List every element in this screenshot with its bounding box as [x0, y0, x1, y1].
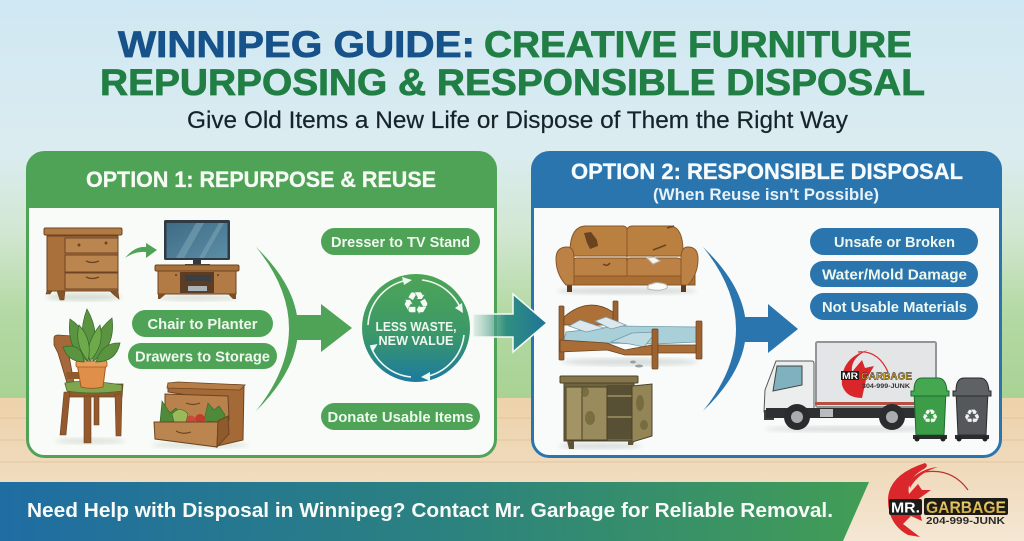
- label: not usable materials: Not Usable Materials: [822, 299, 967, 316]
- truck logo: 304-999-JUNK: [862, 384, 911, 390]
- title: CREATIVE FURNITURE: [484, 24, 912, 65]
- panel: option 2 responsible disposal: [532, 152, 1001, 456]
- truck logo: [841, 350, 912, 398]
- icon: green recycling bin: ♻: [921, 407, 939, 428]
- arrow: crescent to removal: [703, 247, 798, 411]
- icon: damaged sofa: [556, 226, 698, 294]
- icon: moldy cabinet: [558, 376, 652, 449]
- label: donate usable items: [321, 403, 480, 430]
- label: chair to planter: [132, 310, 273, 337]
- icon: recycle symbol: ♻: [402, 286, 430, 321]
- footer banner: [0, 482, 869, 541]
- logo: mr garbage: [888, 463, 1008, 537]
- icon: tv on stand: [155, 220, 239, 301]
- logo: mr garbage: MR.: [891, 500, 920, 516]
- arrow: crescent to result: [256, 247, 352, 411]
- panel 1 heading: OPTION 1: REPURPOSE & REUSE: [86, 167, 436, 192]
- panel 2 subheading: (When Reuse isn't Possible): [653, 186, 879, 204]
- badge: less waste, new value: LESS WASTE,: [376, 320, 456, 334]
- icon: green curved arrow: [125, 243, 157, 258]
- logo: mr garbage: GARBAGE: [926, 498, 1006, 517]
- label: water and mold damage: [810, 261, 978, 287]
- panel 1 header: [27, 152, 496, 208]
- label: drawers to storage: Drawers to Storage: [135, 348, 270, 366]
- label: unsafe or broken: Unsafe or Broken: [834, 234, 955, 251]
- label: drawers to storage: [128, 343, 277, 369]
- label: chair to planter: Chair to Planter: [148, 316, 258, 333]
- footer call to action: Need Help with Disposal in Winnipeg? Contact Mr. Garbage for Reliable Removal.: [27, 500, 833, 522]
- icon: gray recycling bin: [953, 378, 991, 442]
- arrow: from option 1 to option 2: [473, 294, 547, 352]
- icon: damaged bed: [559, 301, 702, 369]
- label: donate usable items: Donate Usable Items: [328, 409, 474, 426]
- label: unsafe or broken: [810, 228, 978, 255]
- icon: chair with plant: [54, 309, 125, 444]
- panel 2 header: [532, 152, 1001, 208]
- truck logo: MR: [842, 371, 859, 381]
- label: water and mold damage: Water/Mold Damage: [822, 266, 967, 284]
- icon: dresser: [44, 228, 122, 301]
- title: [100, 24, 925, 103]
- label: dresser to tv stand: Dresser to TV Stand: [331, 234, 470, 251]
- title: WINNIPEG GUIDE:: [118, 24, 475, 65]
- truck logo: GARBAGE: [861, 372, 912, 382]
- subtitle: Give Old Items a New Life or Dispose of Them the Right Way: [187, 107, 848, 134]
- badge: less waste, new value: NEW VALUE: [378, 334, 454, 348]
- label: not usable materials: [810, 293, 978, 320]
- label: dresser to tv stand: [321, 228, 480, 255]
- icon: green recycling bin: [911, 378, 949, 442]
- badge: less waste, new value: [362, 274, 470, 382]
- logo: mr garbage: 204-999-JUNK: [926, 515, 1005, 527]
- panel: option 1 repurpose and reuse: [27, 152, 496, 456]
- icon: gray recycling bin: ♻: [963, 407, 981, 428]
- title: REPURPOSING & RESPONSIBLE DISPOSAL: [100, 62, 925, 103]
- panel 2 heading: OPTION 2: RESPONSIBLE DISPOSAL: [571, 159, 963, 184]
- icon: removal truck: [764, 342, 936, 432]
- icon: drawers with vegetables: [152, 382, 248, 448]
